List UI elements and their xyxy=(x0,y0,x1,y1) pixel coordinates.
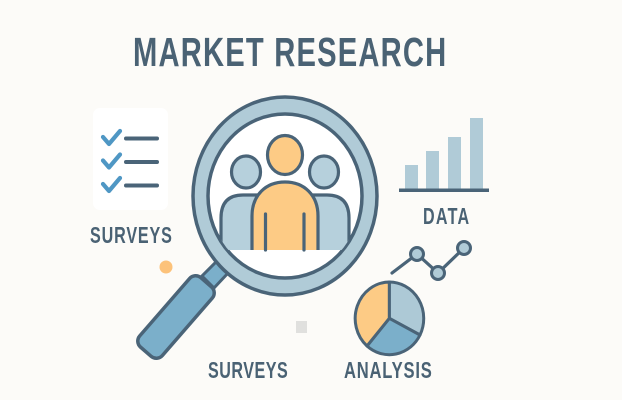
checklist lines xyxy=(126,138,157,186)
label: surveys bottom: SURVEYS xyxy=(208,358,288,384)
panel: surveys checklist xyxy=(93,108,168,210)
line chart xyxy=(392,242,470,280)
pie chart xyxy=(355,282,424,355)
person: centre xyxy=(252,136,318,250)
checkmarks xyxy=(103,131,120,191)
checklist card xyxy=(93,108,168,210)
magnifying glass xyxy=(135,97,377,362)
infographic: market research xyxy=(90,38,489,378)
orange dot xyxy=(160,260,172,274)
lens glass xyxy=(208,114,362,278)
handle xyxy=(135,272,217,362)
handle neck xyxy=(202,261,229,288)
lens ring xyxy=(193,97,377,295)
person: left xyxy=(219,154,262,250)
people group xyxy=(221,136,349,270)
title: MARKET RESEARCH xyxy=(133,30,446,75)
label: data: DATA xyxy=(423,204,469,230)
bar chart xyxy=(399,118,489,192)
label: analysis: ANALYSIS xyxy=(344,358,432,384)
label: surveys left: SURVEYS xyxy=(90,223,172,249)
gray square xyxy=(296,321,307,333)
person: right xyxy=(308,154,351,250)
